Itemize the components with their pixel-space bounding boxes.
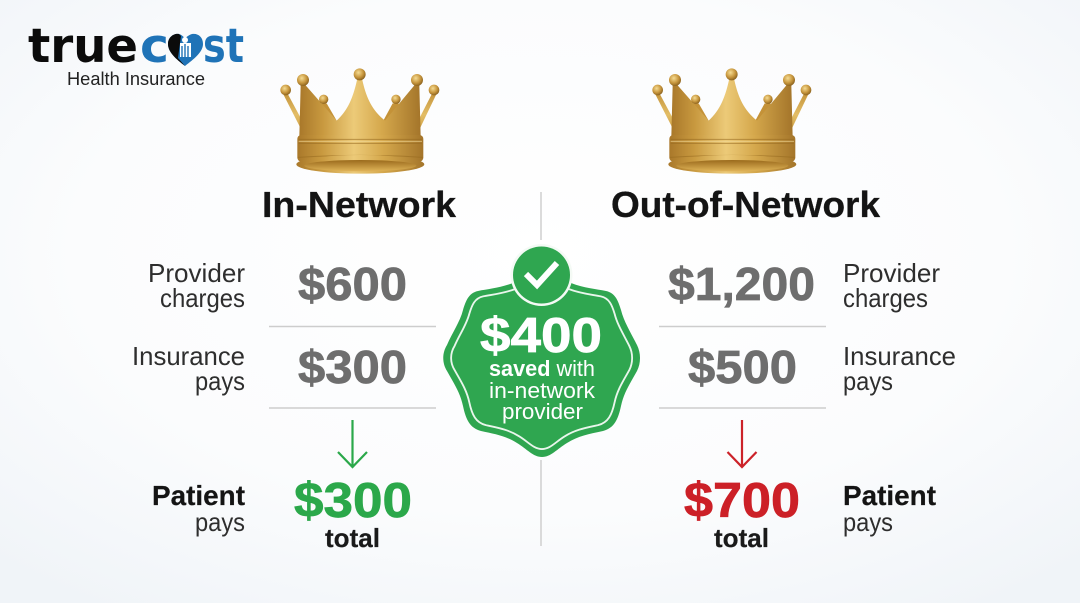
row divider — [659, 326, 826, 328]
value: patient pays $700 total: total — [714, 523, 769, 553]
row divider — [269, 326, 436, 328]
badge shape — [443, 270, 640, 457]
label: patient pays: Patient — [843, 480, 936, 511]
value: provider charges $1,200: $1,200 — [668, 258, 815, 310]
badge amount: $400 — [480, 309, 602, 363]
label: insurance pays: Insurance — [843, 341, 956, 371]
value: patient pays $700 total: $700 — [684, 474, 800, 528]
row divider — [659, 407, 826, 409]
panel: out-of-network — [611, 184, 956, 553]
icon: right crown — [652, 68, 811, 174]
value: patient pays $700 total — [684, 474, 800, 553]
value: insurance pays $300: $300 — [298, 341, 407, 393]
label: provider charges: Provider — [843, 258, 940, 288]
label: patient pays: pays — [843, 507, 893, 537]
icon: check circle — [510, 244, 572, 306]
label: insurance pays: Insurance — [132, 341, 245, 371]
value: provider charges $600: $600 — [298, 258, 407, 310]
label: insurance pays: pays — [843, 366, 893, 396]
value: patient pays $300 total: total — [325, 523, 380, 553]
label: provider charges: charges — [160, 283, 245, 313]
label: insurance pays: pays — [195, 366, 245, 396]
label: patient pays: Patient — [152, 480, 245, 511]
arrow: red down — [728, 420, 756, 467]
heading: Out-of-Network: Out-of-Network — [611, 184, 881, 225]
label: provider charges — [148, 258, 245, 313]
label: patient pays: pays — [195, 507, 245, 537]
label: provider charges — [843, 258, 940, 313]
logo: truecost Health Insurance — [28, 19, 244, 89]
row divider — [269, 407, 436, 409]
label: patient pays — [152, 480, 245, 537]
label: patient pays — [843, 480, 936, 537]
arrow: green down — [338, 420, 367, 467]
logo: truecost Health Insurance: Health Insurance — [67, 69, 205, 89]
badge caption: provider — [502, 399, 583, 424]
label: provider charges: Provider — [148, 258, 245, 288]
logo: truecost Health Insurance: st — [203, 19, 244, 74]
badge caption: in-network — [489, 378, 596, 403]
icon: left crown — [280, 68, 439, 174]
label: provider charges: charges — [843, 283, 928, 313]
heading: In-Network: In-Network — [262, 184, 457, 225]
label: insurance pays — [132, 341, 245, 396]
label: insurance pays — [843, 341, 956, 396]
value: patient pays $300 total: $300 — [294, 474, 412, 528]
center divider — [540, 192, 542, 546]
logo: truecost Health Insurance: true — [28, 19, 138, 74]
badge: $400 saved — [443, 244, 640, 457]
badge caption: saved with — [489, 356, 595, 381]
badge caption — [489, 356, 596, 424]
logo: truecost Health Insurance: c — [140, 19, 169, 74]
value: patient pays $300 total — [294, 474, 412, 553]
panel: in-network — [132, 184, 457, 553]
value: insurance pays $500: $500 — [688, 341, 797, 393]
